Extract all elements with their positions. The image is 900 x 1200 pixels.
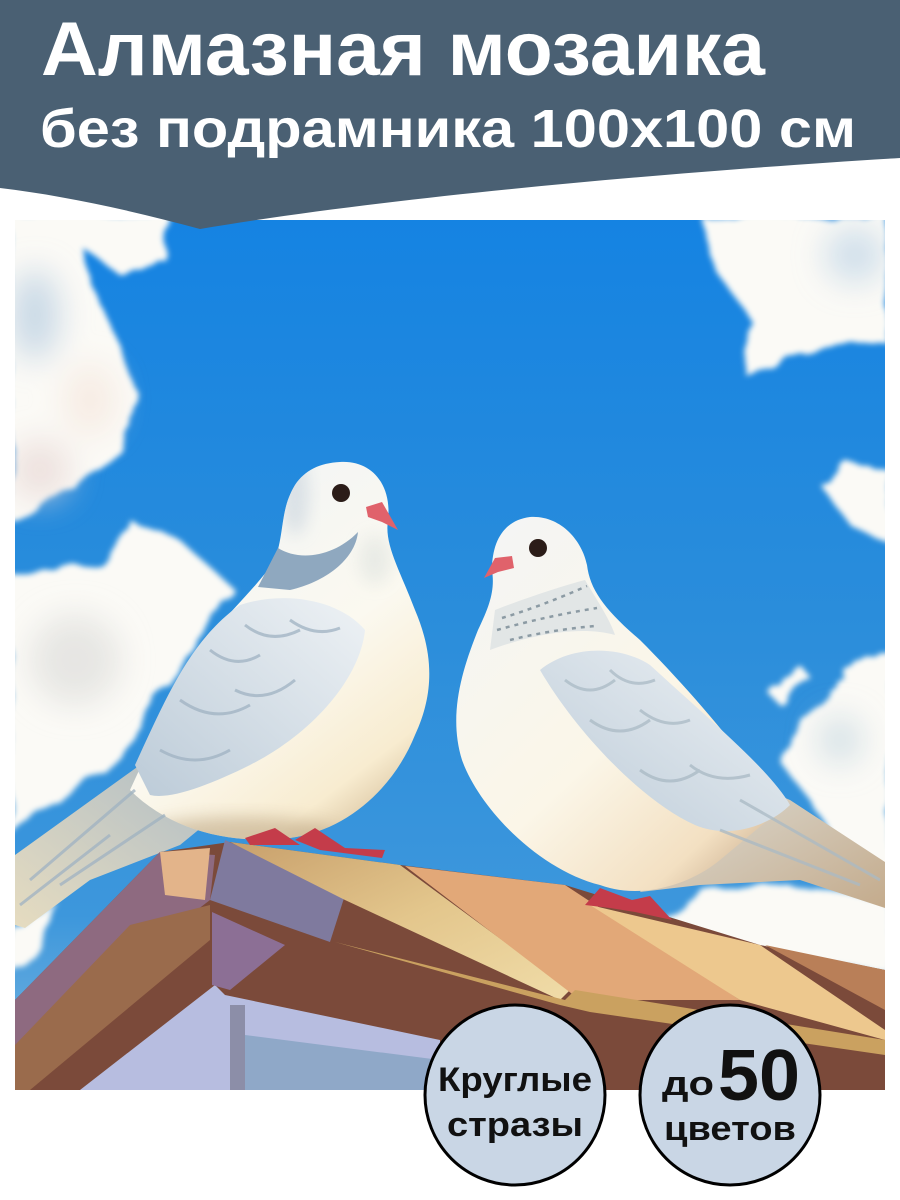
roof left slope [15,852,215,1050]
painting: two white doves on a roof [10,215,890,1090]
right dove neck [490,580,615,650]
roof ridge beam [210,840,345,942]
left dove tail [15,768,198,928]
title: Алмазная мозаика [41,7,766,92]
cloud shadows [10,227,885,764]
left dove wing [135,598,365,796]
left dove beak [366,502,398,530]
roof [15,840,885,1090]
left dove neck [258,532,358,590]
roof fascia edge [335,942,885,1055]
badge: round rhinestones [425,1005,605,1185]
header banner [0,0,900,229]
right dove wing [540,651,790,831]
clouds [10,215,890,975]
left dove [15,455,429,928]
right dove body [456,517,780,891]
badge text line 2: стразы [447,1106,583,1144]
badge word: цветов: цветов [664,1110,796,1148]
badge: up to 50 colours [640,1005,820,1185]
banner shape [0,0,900,229]
sky [15,220,885,1000]
roof planks [230,842,570,1000]
right dove [456,517,885,908]
badge text line 1: Круглые [438,1061,592,1099]
dove feet [245,828,672,920]
badge word: до: до [662,1065,714,1103]
left dove body [130,462,429,840]
left dove eye [332,484,350,502]
subtitle: без подрамника 100х100 см [40,99,856,159]
right dove tail [640,770,885,908]
right dove beak [484,556,514,578]
badge number: 50: 50 [718,1036,800,1116]
house wall [80,985,440,1090]
right dove eye [529,539,547,557]
roof base [15,842,885,1090]
